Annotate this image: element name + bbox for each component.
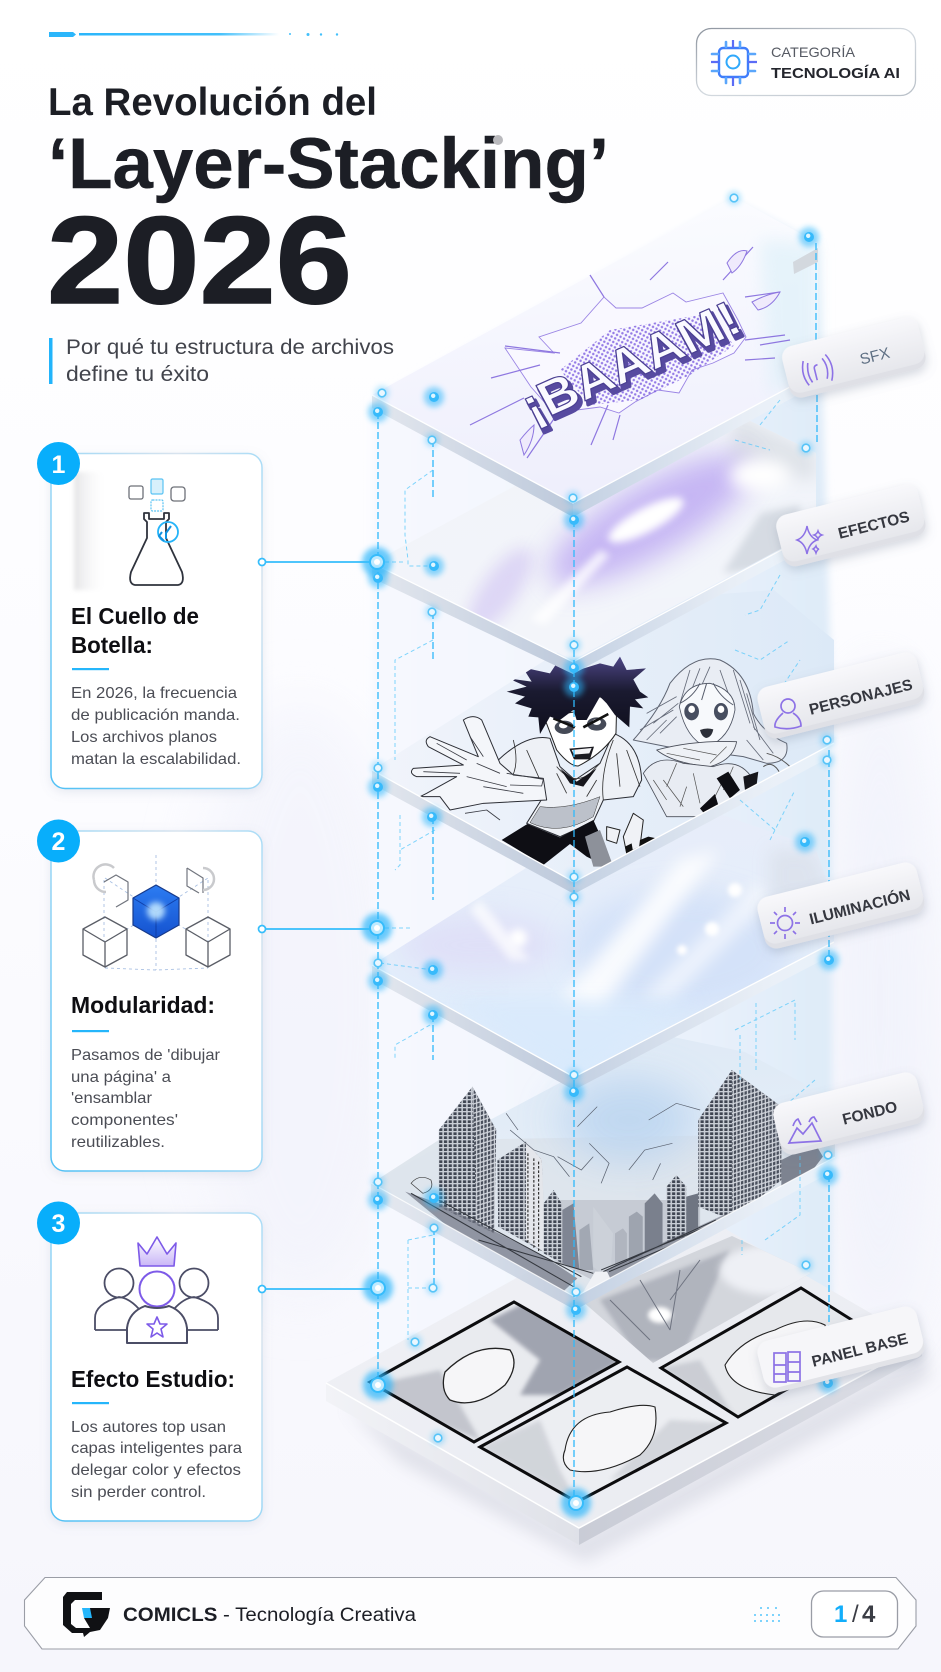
body text: matan la escalabilidad. [71, 751, 241, 768]
badge: number 2 [37, 820, 80, 862]
body text: 'ensamblar [71, 1090, 153, 1107]
tag: panel base [755, 1304, 927, 1395]
icon: signal [800, 354, 835, 387]
label: FONDO [841, 1099, 899, 1129]
boy face [544, 697, 617, 766]
title: ‘Layer-Stacking’ [48, 125, 609, 204]
page counter: 4 [862, 1601, 876, 1628]
top accent bar [49, 32, 338, 37]
heading [71, 603, 199, 658]
body text: reutilizables. [71, 1134, 165, 1151]
page counter: / [852, 1601, 859, 1628]
icon: mountains [789, 1117, 821, 1143]
girl [633, 659, 790, 817]
label: ILUMINACIÓN [807, 886, 912, 928]
icon: AI chip [711, 40, 757, 86]
badge label: CATEGORÍA [771, 44, 856, 60]
heading: Botella: [71, 632, 153, 658]
label: EFECTOS [836, 509, 911, 543]
body text [71, 685, 241, 768]
isometric layer stack [326, 191, 930, 1562]
label: PANEL BASE [810, 1330, 910, 1371]
tag: iluminacion [755, 860, 927, 951]
panel: efecto estudio [51, 1213, 262, 1521]
body text: capas inteligentes para [71, 1440, 242, 1457]
tag: fondo [771, 1070, 927, 1157]
category badge [696, 28, 916, 96]
sketch D [586, 1236, 810, 1363]
icon: panels [774, 1352, 800, 1382]
boy hand [411, 717, 547, 810]
panel frame B [480, 1367, 726, 1502]
body text [71, 1047, 221, 1151]
layer: panel base [328, 1236, 931, 1562]
logo [63, 1592, 110, 1637]
panel: modularidad [51, 831, 262, 1171]
icon: cubes [83, 855, 230, 970]
body text: Los autores top usan [71, 1419, 226, 1436]
body text: Pasamos de 'dibujar [71, 1047, 221, 1064]
badge: number 1: 1 [52, 451, 66, 479]
city sketch [371, 1070, 835, 1302]
subtitle [49, 336, 394, 386]
icon: person [775, 699, 801, 729]
BAAAM burst: ¡BAAAM! [512, 291, 750, 433]
badge value: TECNOLOGÍA AI [771, 65, 900, 82]
footer bar [24, 1578, 916, 1649]
decorative dots [754, 1607, 780, 1622]
boy hair [507, 657, 648, 734]
body text: componentes' [71, 1112, 178, 1129]
dashed connectors and nodes [362, 191, 839, 1518]
tag: SFX [780, 315, 928, 400]
badge: number 1 [37, 442, 80, 485]
subtitle: Por qué tu estructura de archivos [66, 336, 394, 359]
body text: una página' a [71, 1069, 171, 1086]
body text: de publicación manda. [71, 707, 240, 724]
label: PERSONAJES [807, 677, 914, 719]
heading: Modularidad: [71, 992, 215, 1018]
icon: flask with files [129, 479, 185, 585]
heading: Efecto Estudio: [71, 1366, 235, 1392]
layer: iluminacion [372, 854, 834, 1088]
icon: team with crown [95, 1237, 218, 1343]
page counter [812, 1591, 898, 1637]
layer: efectos [372, 413, 816, 674]
boy body [411, 717, 642, 867]
title [47, 81, 609, 330]
brand text: COMICLS - Tecnología Creativa [123, 1605, 416, 1626]
layer: fondo [371, 1033, 835, 1310]
panel frame A [370, 1300, 620, 1442]
title: La Revolución del [48, 81, 377, 124]
connector lines [258, 558, 370, 1292]
tag: personajes [755, 650, 927, 741]
body text: En 2026, la frecuencia [71, 685, 237, 702]
BAAAM burst [470, 247, 790, 458]
subtitle: define tu éxito [66, 363, 209, 386]
heading: El Cuello de [71, 603, 199, 629]
tag: efectos [774, 482, 928, 569]
icon: sun [770, 907, 800, 939]
label: SFX [858, 345, 892, 369]
badge: number 3: 3 [52, 1210, 65, 1238]
body text: sin perder control. [71, 1484, 206, 1501]
glass column volume [372, 200, 832, 1500]
body text [71, 1419, 242, 1501]
icon: sparkles [797, 526, 822, 554]
body text: delegar color y efectos [71, 1462, 241, 1479]
panel frame C [661, 1288, 879, 1417]
manga characters [411, 657, 790, 867]
layer: personajes [372, 590, 834, 894]
page counter: 1 [834, 1601, 847, 1628]
BAAAM burst: ¡BAAAM! [515, 295, 753, 437]
layer: sfx [372, 197, 818, 517]
panel: el cuello de botella [51, 454, 262, 788]
title: 2026 [47, 192, 352, 330]
body text: Los archivos planos [71, 729, 217, 746]
badge: number 2: 2 [52, 828, 65, 856]
badge: number 3 [37, 1202, 80, 1244]
